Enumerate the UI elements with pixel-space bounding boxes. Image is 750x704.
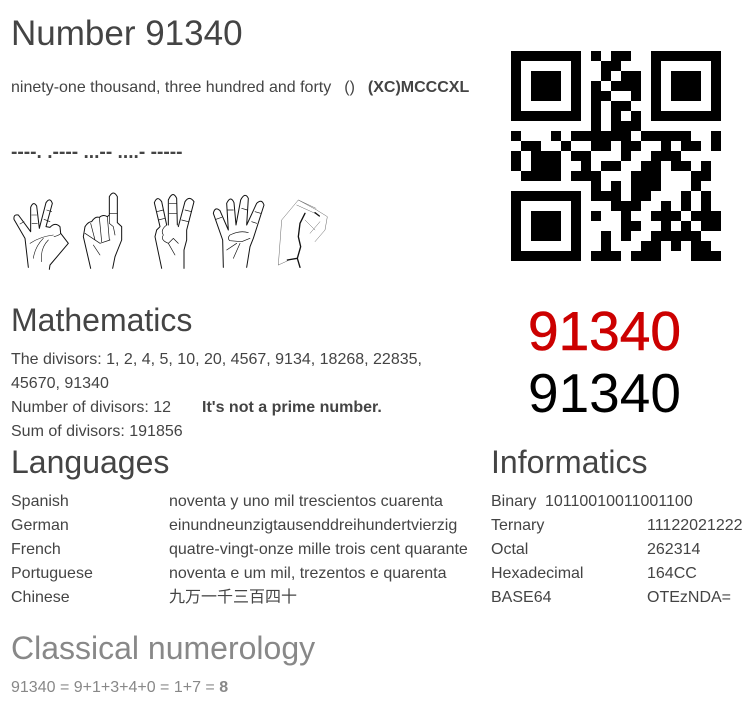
table: informatics: Octal: [491, 541, 528, 558]
icon: hand sign 0: [278, 200, 327, 267]
icon: hand sign 1: [83, 193, 122, 268]
table: languages: [11, 493, 468, 606]
text block: divisors: It's not a prime number.: [202, 399, 382, 416]
heading: languages: Languages: [11, 444, 169, 480]
text block: divisors: 45670, 91340: [11, 375, 109, 392]
text block: divisors: The divisors: 1, 2, 4, 5, 10, 20, 4567, 9134, 18268, 22835,: [11, 351, 422, 368]
table: informatics: Ternary: [491, 517, 544, 534]
table: languages: Portuguese: [11, 565, 93, 582]
text block: divisors: Sum of divisors: 191856: [11, 423, 183, 440]
text block: divisors: [11, 351, 422, 440]
icon: sign language hands: [13, 192, 328, 270]
icon: hand sign 3: [154, 195, 194, 268]
icon: hand sign 9: [14, 200, 68, 269]
table: languages: French: [11, 541, 61, 558]
number name and roman numeral: ninety-one thousand, three hundred and forty () (XC)MCCCXL: [11, 79, 469, 96]
table: informatics: [491, 493, 743, 606]
table: languages: Spanish: [11, 493, 69, 510]
table: languages: Chinese: [11, 589, 70, 606]
table: languages: noventa y uno mil trescientos cuarenta: [169, 493, 443, 510]
table: informatics: 164CC: [647, 565, 697, 582]
table: languages: noventa e um mil, trezentos e quarenta: [169, 565, 446, 582]
table: informatics: 10110010011001100: [545, 493, 693, 510]
icon: hand sign 4: [213, 195, 264, 267]
big number: black: 91340: [528, 362, 681, 424]
text: numerology sum: 91340 = 9+1+3+4+0 = 1+7 = 8: [11, 679, 228, 696]
text block: divisors: Number of divisors: 12: [11, 399, 171, 416]
table: informatics: BASE64: [491, 589, 551, 606]
table: languages: einundneunzigtausenddreihundertvierzig: [169, 517, 457, 534]
table: informatics: 11122021222: [647, 517, 743, 534]
heading: mathematics: Mathematics: [11, 302, 192, 338]
QR code: [511, 51, 721, 261]
table: informatics: Hexadecimal: [491, 565, 583, 582]
table: languages: quatre-vingt-onze mille trois cent quarante: [169, 541, 468, 558]
heading: informatics: Informatics: [491, 444, 647, 480]
table: languages: 九万一千三百四十: [169, 589, 297, 606]
big number: red: 91340: [528, 300, 681, 362]
table: informatics: 262314: [647, 541, 700, 558]
morse code: ----. .---- ...-- ....- -----: [11, 142, 183, 163]
table: languages: German: [11, 517, 69, 534]
heading: classical numerology: Classical numerology: [11, 630, 315, 666]
table: informatics: Binary: [491, 493, 536, 510]
table: informatics: OTEzNDA=: [647, 589, 731, 606]
title: Number 91340: [11, 14, 243, 53]
